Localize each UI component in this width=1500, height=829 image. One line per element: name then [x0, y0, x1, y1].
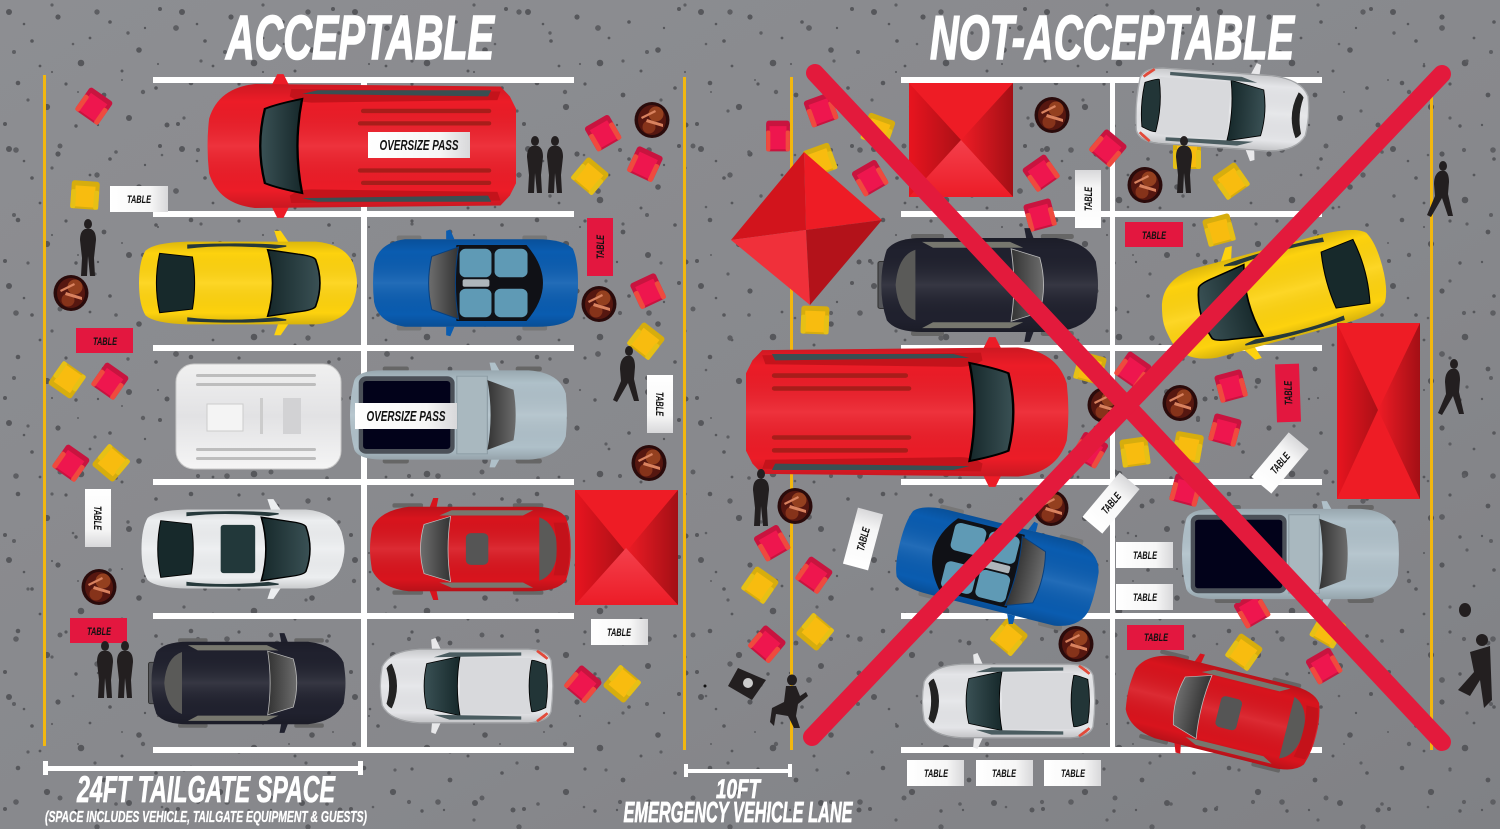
- vehicle: yellow sedan angled: [1149, 210, 1397, 380]
- vehicle: yellow sedan: [139, 231, 357, 335]
- vehicle: dark suv: [878, 228, 1098, 342]
- label: 24ft tailgate space: 24FT TAILGATE SPACE: [76, 769, 336, 810]
- oversize pass label on van: OVERSIZE PASS: [380, 137, 458, 154]
- oversize pass label on van: [368, 132, 470, 158]
- title: acceptable: ACCEPTABLE: [225, 4, 495, 73]
- chairs under vehicles: [741, 92, 1347, 685]
- vehicle: red suv angled: [1117, 639, 1329, 785]
- tables right panel: TABLE: [924, 768, 948, 780]
- label: 10ft: 10FT: [716, 774, 762, 804]
- vehicle: red suv: [370, 498, 571, 600]
- canopy tent: [575, 490, 678, 605]
- oversize pass label on pickup: OVERSIZE PASS: [366, 408, 446, 425]
- title: not-acceptable: NOT-ACCEPTABLE: [930, 4, 1295, 73]
- tables left panel: [70, 186, 673, 645]
- vehicle: silver hatchback bottom: [922, 653, 1095, 749]
- tables left panel: TABLE: [91, 506, 103, 530]
- vehicle: blue convertible angled: [887, 491, 1108, 642]
- emergency lane dimension: [624, 764, 853, 829]
- tables right panel: TABLE: [1142, 230, 1166, 242]
- vehicle: blue convertible: [373, 230, 578, 336]
- label: emergency vehicle lane: EMERGENCY VEHICLE LANE: [624, 797, 853, 829]
- oversize pass label on pickup: [355, 403, 457, 429]
- tables right panel: TABLE: [1061, 768, 1085, 780]
- vehicle: white trailer: [176, 364, 341, 469]
- vehicle: white sedan: [142, 499, 344, 599]
- vehicle: red van oversize: [746, 337, 1068, 487]
- tables left panel: TABLE: [127, 194, 151, 206]
- people right panel: [753, 136, 1464, 526]
- canopy tent tall: [1337, 323, 1420, 499]
- vehicle: red oversize van: [208, 74, 516, 218]
- vehicle: dark suv: [148, 633, 346, 733]
- tables left panel: TABLE: [93, 336, 117, 348]
- vehicle: silver hatchback: [380, 638, 553, 734]
- tables left panel: TABLE: [607, 627, 631, 639]
- vehicle: silver pickup with trailer: [350, 363, 567, 467]
- grills left panel: [54, 102, 670, 605]
- person catching football: [1458, 603, 1492, 708]
- parking lines right: [790, 75, 1433, 753]
- vehicle: silver hatchback top: [1133, 55, 1312, 165]
- tables right panel: TABLE: [1083, 187, 1095, 211]
- tables right panel: TABLE: [1268, 450, 1293, 477]
- tables left panel: TABLE: [87, 626, 111, 638]
- panel: acceptable layout: [43, 4, 686, 826]
- tables right panel: TABLE: [1144, 632, 1168, 644]
- tables right panel: TABLE: [1283, 380, 1295, 405]
- tables right panel: TABLE: [855, 526, 873, 552]
- tables left panel: TABLE: [653, 392, 665, 416]
- vehicle: silver pickup: [1182, 501, 1399, 607]
- grills right panel: [778, 97, 1198, 662]
- dimension: 10ft bracket: [684, 764, 792, 777]
- panel: not-acceptable layout: [704, 4, 1492, 786]
- red X over not-acceptable: [812, 73, 1442, 742]
- person playing cornhole: [770, 674, 808, 728]
- tables right panel: TABLE: [1099, 490, 1124, 517]
- canopy tent diamond: [731, 152, 882, 305]
- tables right panel: TABLE: [1133, 550, 1157, 562]
- canopy tent square: [909, 83, 1013, 197]
- dimension: 24ft bracket: [43, 761, 363, 775]
- tables right panel: TABLE: [1133, 592, 1157, 604]
- label: space includes note: (SPACE INCLUDES VEHICLE, TAILGATE EQUIPMENT & GUESTS): [45, 809, 367, 826]
- chairs left panel: [48, 87, 667, 704]
- tables left panel: TABLE: [595, 235, 607, 259]
- people left panel: [80, 136, 639, 698]
- cornhole board: [704, 668, 766, 700]
- tables right panel: [843, 170, 1309, 786]
- parking lines left: [43, 75, 686, 753]
- tables right panel: TABLE: [992, 768, 1016, 780]
